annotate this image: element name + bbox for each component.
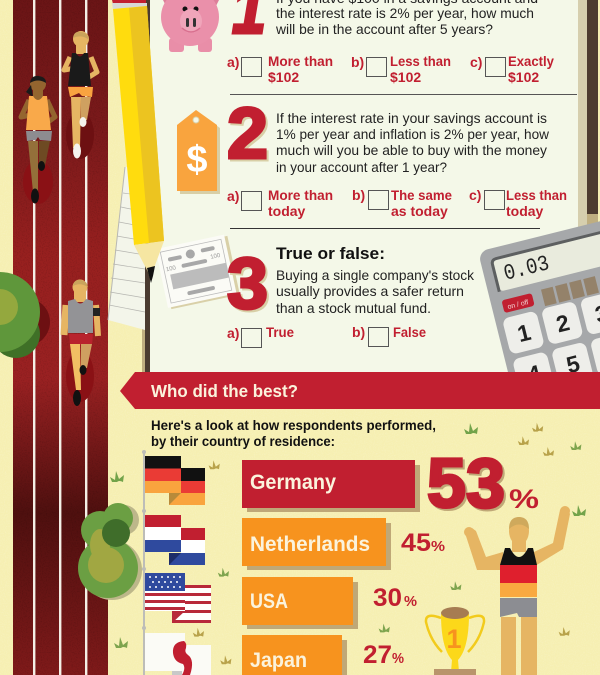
answers for question 3: True — [266, 324, 294, 340]
answers for question 2: b) — [352, 187, 365, 203]
intro text: Here's a look at how respondents performed, — [151, 417, 436, 433]
question 1 text: will be in the account after 5 years? — [275, 21, 493, 37]
calculator: on / off — [507, 299, 529, 311]
question 1 text: the interest rate is 2% per year, how much — [276, 5, 534, 21]
answers for question 2: today — [506, 203, 544, 219]
value: 53% — [427, 444, 539, 524]
answers for question 2 — [227, 187, 567, 219]
answers for question 3 — [227, 324, 426, 348]
bar: Japan: Japan — [250, 649, 307, 672]
question 2 text: 1% per year and inflation is 2% per year, how — [276, 126, 550, 142]
answers for question 1: More than — [268, 53, 333, 69]
value: 53%: % — [509, 484, 539, 514]
answers for question 2: More than — [268, 187, 333, 203]
tree on the track edge — [0, 272, 50, 358]
value: 45%: % — [431, 538, 445, 555]
trophy: 1 — [446, 624, 462, 654]
grass tufts — [110, 423, 586, 664]
runner: man in grey tank — [64, 280, 100, 406]
icon: stock certificate: 100 — [166, 265, 177, 273]
number 3: 3 — [229, 246, 270, 326]
calculator: 0.03 — [501, 251, 552, 287]
flag: Netherlands — [145, 515, 205, 565]
flag: Japan — [145, 633, 211, 675]
question 2 — [227, 94, 567, 219]
answers for question 2: today — [268, 203, 306, 219]
answers for question 2: Less than — [506, 187, 567, 203]
answers for question 3: b) — [352, 324, 365, 340]
number 2: 2 — [227, 94, 268, 174]
answers for question 2: a) — [227, 188, 239, 204]
answers for question 1: b) — [351, 54, 364, 70]
bar: Netherlands — [242, 518, 391, 570]
pencil — [112, 0, 164, 283]
calculator: 4 — [525, 360, 544, 388]
value: 53%: 53 — [427, 444, 505, 522]
intro text: by their country of residence: — [151, 433, 335, 449]
question 3 text: Buying a single company's stock — [276, 267, 475, 283]
question 2 text — [276, 110, 550, 175]
ribbon heading: Who did the best? — [151, 381, 298, 401]
answers for question 3: a) — [227, 325, 239, 341]
bar: Germany — [242, 460, 420, 512]
answers for question 1: $102 — [268, 69, 299, 85]
bar: Netherlands: Netherlands — [250, 533, 370, 556]
value: 45%: 45 — [401, 529, 431, 557]
notebook pages behind pencil — [108, 167, 145, 330]
answers for question 1: c) — [470, 54, 482, 70]
answers for question 1: Less than — [390, 53, 451, 69]
answers for question 1: $102 — [390, 69, 421, 85]
value: 27%: 27 — [363, 641, 392, 669]
running track — [13, 0, 108, 675]
calculator — [480, 221, 600, 372]
ribbon heading — [120, 372, 600, 409]
answers for question 3: False — [393, 324, 426, 340]
answers for question 1: $102 — [508, 69, 539, 85]
value: 45% — [401, 529, 445, 557]
tree beside the track — [78, 503, 142, 600]
question 3 text: than a stock mutual fund. — [276, 300, 431, 316]
bar: USA: USA — [250, 590, 288, 613]
value: 53%: 53 — [429, 446, 507, 524]
answers for question 2: The same — [391, 187, 452, 203]
icon: dollar price tag: $ — [186, 139, 208, 181]
calculator: 5 — [564, 350, 583, 378]
bar: Germany: Germany — [250, 471, 336, 494]
value: 27% — [363, 641, 404, 669]
winner athlete — [464, 506, 570, 675]
runner: woman in orange top — [21, 76, 55, 204]
flag pole — [142, 450, 146, 675]
calculator: 1 — [515, 319, 534, 347]
question 3 text — [276, 267, 475, 316]
answers for question 1: Exactly — [508, 53, 554, 69]
icon: stock certificate — [156, 234, 240, 310]
value: 30%: % — [404, 593, 417, 610]
question 3 heading: True or false: — [276, 244, 385, 263]
icon: piggy bank — [161, 0, 221, 52]
bar: USA — [242, 577, 358, 629]
number 3: 3 — [227, 244, 268, 324]
answers for question 1: a) — [227, 54, 239, 70]
icon: stock certificate: 100 — [210, 253, 222, 261]
flag: Germany — [145, 456, 205, 505]
question 3 text: usually provides a safer return — [276, 283, 464, 299]
question 2 text: much will you be able to buy with the money — [276, 142, 547, 158]
question 2 text: If the interest rate in your savings account is — [276, 110, 547, 126]
flag: USA — [145, 573, 211, 623]
number 2: 2 — [229, 96, 270, 176]
intro text — [151, 417, 436, 449]
question 1 text — [275, 0, 538, 37]
value: 30% — [373, 584, 417, 612]
question 3 — [227, 244, 475, 348]
question 2 text: in your account after 1 year? — [276, 159, 447, 175]
runner: woman in black top — [64, 31, 97, 159]
value: 30%: 30 — [373, 584, 402, 612]
icon: dollar price tag — [177, 110, 220, 194]
bar: Japan — [242, 635, 347, 675]
value: 27%: % — [392, 650, 404, 667]
question 1 — [227, 0, 554, 85]
trophy — [426, 607, 484, 675]
notebook panel with frame — [142, 0, 598, 372]
answers for question 2: as today — [391, 203, 448, 219]
calculator: 2 — [553, 309, 572, 337]
answers for question 1 — [227, 53, 554, 85]
answers for question 2: c) — [469, 187, 481, 203]
